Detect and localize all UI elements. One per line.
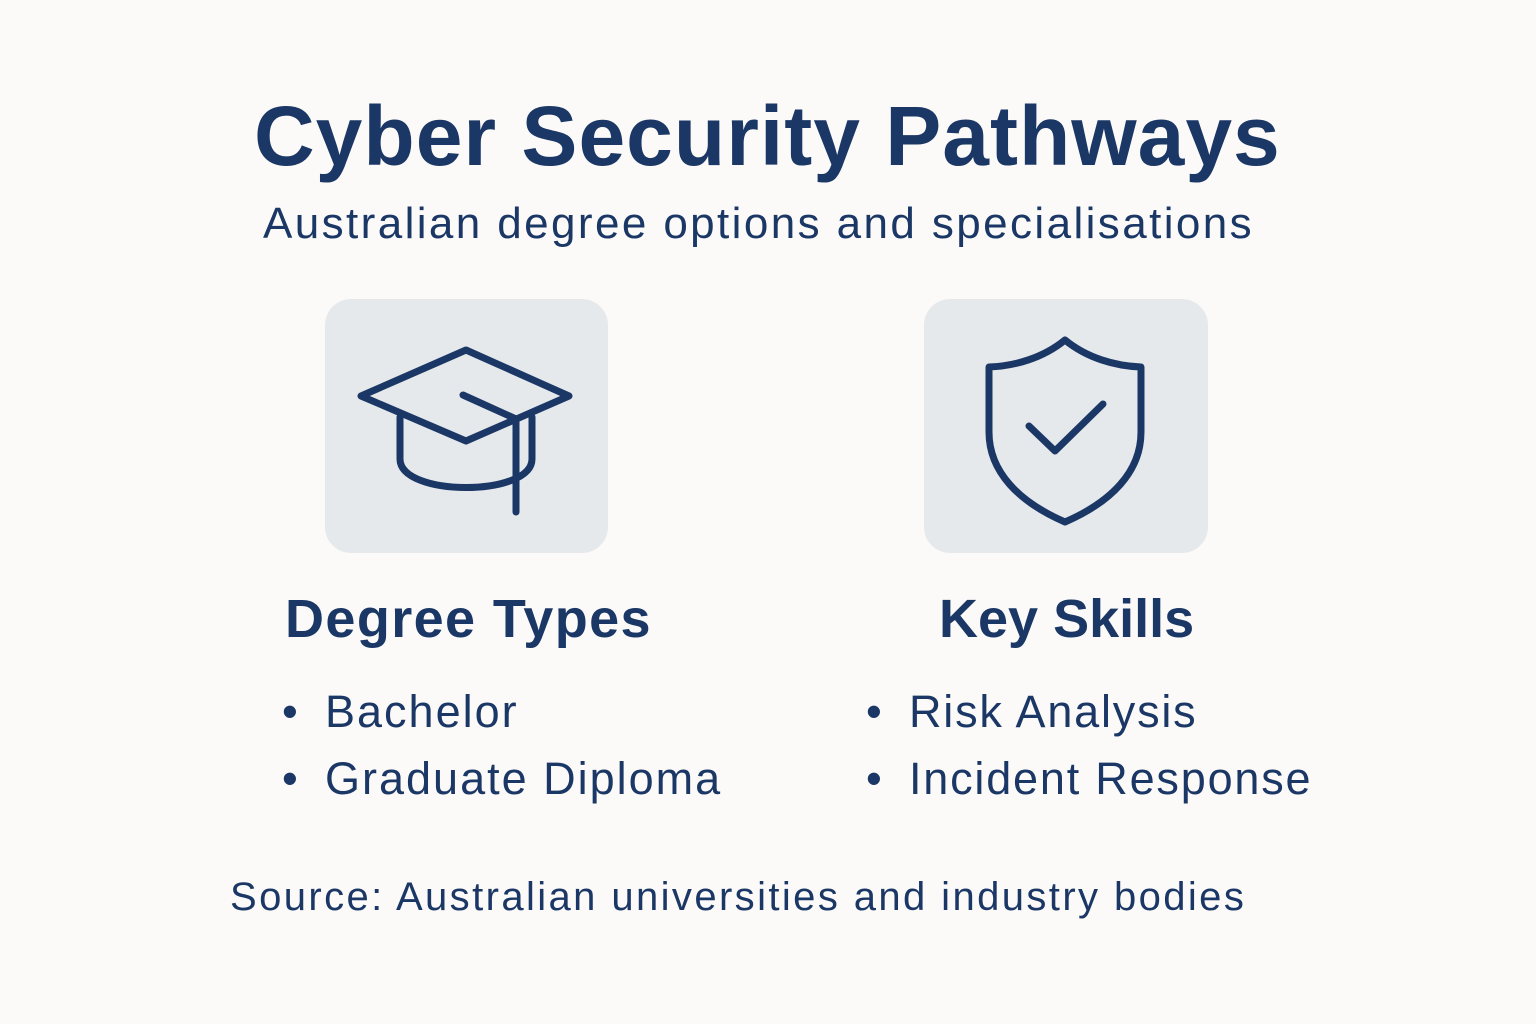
title: Cyber Security Pathways (254, 89, 1281, 183)
list: degree types: • (282, 686, 298, 737)
source: Source: Australian universities and industry bodies (230, 875, 1246, 919)
heading: Degree Types: Degree Types (285, 589, 652, 649)
icon: graduation cap (325, 299, 608, 553)
list: key skills: • (866, 686, 882, 737)
list: degree types (282, 686, 722, 804)
list: key skills: Incident Response (909, 753, 1312, 804)
list: degree types: Bachelor (325, 686, 519, 737)
subtitle: Australian degree options and specialisations (263, 199, 1254, 248)
list: key skills: Risk Analysis (909, 686, 1197, 737)
list: degree types: Graduate Diploma (325, 753, 722, 804)
heading: Key Skills: Key Skills (939, 589, 1194, 649)
icon: shield (924, 299, 1208, 553)
list: key skills (866, 686, 1312, 804)
list: degree types: • (282, 753, 298, 804)
list: key skills: • (866, 753, 882, 804)
